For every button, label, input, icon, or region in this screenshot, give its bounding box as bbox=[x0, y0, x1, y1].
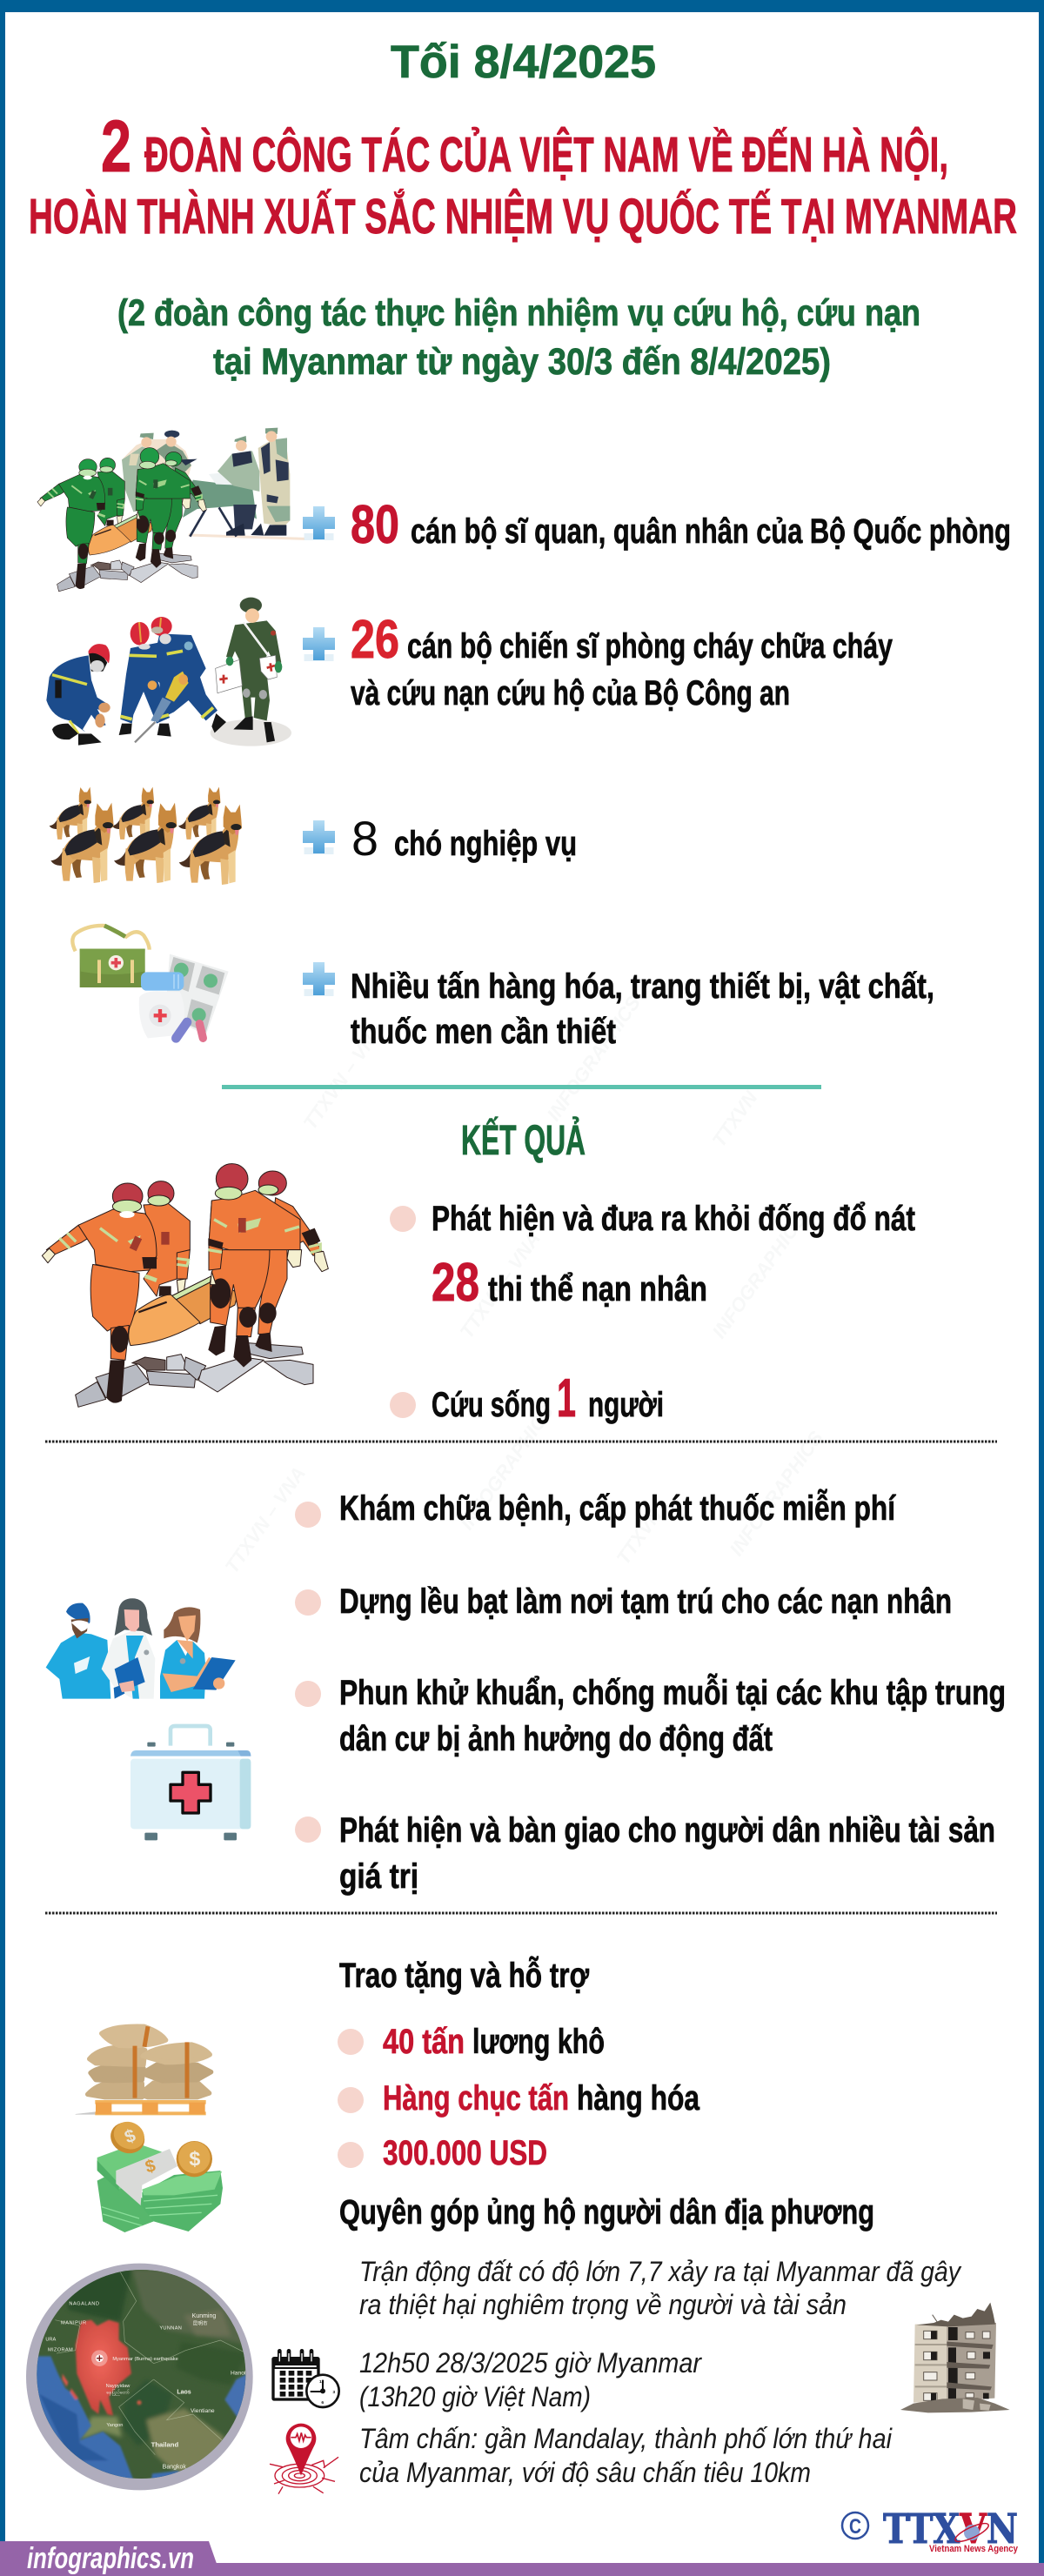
map: earthquake area: Kunming bbox=[192, 2313, 216, 2319]
result item: 1 rescued: 1 bbox=[557, 1368, 576, 1429]
illustration: collapsed building bbox=[900, 2303, 1010, 2412]
map: earthquake area: Myanmar (Burma) earthquake bbox=[112, 2357, 178, 2362]
text: TTXVN bbox=[708, 1087, 762, 1151]
illustration: medical staff bbox=[46, 1598, 236, 1699]
text: earthquake facts: (13h20 giờ Việt Nam) bbox=[359, 2381, 591, 2412]
icon: calendar and clock: 6 bbox=[321, 2400, 324, 2405]
result item: 28 bodies bbox=[390, 1200, 915, 1313]
illustration: money bbox=[97, 2117, 223, 2232]
result item: 28 bodies: 28 bbox=[432, 1253, 479, 1313]
icon: calendar and clock: 12 bbox=[319, 2379, 325, 2385]
map: earthquake area: Naypyidaw bbox=[106, 2384, 130, 2389]
heading: results: KẾT QUẢ bbox=[461, 1116, 586, 1164]
map: earthquake area: MANIPUR bbox=[61, 2321, 87, 2326]
footer bar: infographics.vn bbox=[27, 2542, 194, 2575]
list: aid activities: giá trị bbox=[339, 1857, 418, 1896]
map: earthquake area: Laos bbox=[177, 2390, 191, 2396]
result item: 1 rescued: người bbox=[588, 1386, 664, 1424]
list: donations: 40 tấn bbox=[383, 2023, 465, 2061]
icon: plus bbox=[303, 962, 335, 996]
map: earthquake area: နေပြည်တော် bbox=[106, 2388, 130, 2397]
list: donations: Hàng chục tấn bbox=[383, 2079, 569, 2118]
item: 80 officers bbox=[351, 495, 1011, 555]
result item: 28 bodies: thi thể nạn nhân bbox=[488, 1270, 707, 1308]
map: earthquake area: Bangkok bbox=[163, 2464, 186, 2470]
item: supplies bbox=[351, 967, 934, 1051]
item: 26 firefighters: cán bộ chiến sĩ phòng cháy chữa cháy bbox=[407, 627, 893, 666]
map: earthquake area: Yangon bbox=[106, 2423, 123, 2428]
text: earthquake facts: Trận động đất có độ lớn 7,7 xảy ra tại Myanmar đã gây bbox=[359, 2256, 962, 2287]
illustration: sacks on pallet bbox=[76, 2026, 211, 2115]
result item: 28 bodies: Phát hiện và đưa ra khỏi đống đổ nát bbox=[432, 1200, 915, 1238]
text: INFOGRAPHICS bbox=[543, 992, 645, 1125]
item: supplies: thuốc men cần thiết bbox=[351, 1013, 616, 1051]
icon: calendar and clock bbox=[271, 2351, 339, 2407]
map: earthquake area: MIZORAM bbox=[48, 2347, 73, 2352]
text: TTXVN – VNA bbox=[456, 1228, 545, 1342]
text: earthquake facts: Tâm chấn: gần Mandalay, thành phố lớn thứ hai bbox=[359, 2423, 893, 2454]
item: supplies: Nhiều tấn hàng hóa, trang thiết bị, vật chất, bbox=[351, 967, 934, 1006]
list: donations: lương khô bbox=[472, 2023, 605, 2061]
list: donations: 300.000 USD bbox=[383, 2134, 547, 2172]
heading: main title bbox=[29, 105, 1017, 244]
item: 26 firefighters: và cứu nạn cứu hộ của Bộ Công an bbox=[351, 674, 790, 713]
list: aid activities: dân cư bị ảnh hưởng do động đất bbox=[339, 1720, 773, 1758]
logo: TTXVN: TTXVN bbox=[883, 2506, 1018, 2553]
list: aid activities bbox=[295, 1488, 1006, 1896]
logo: TTXVN: Vietnam News Agency bbox=[929, 2544, 1019, 2554]
text: TTXVN – VNA bbox=[221, 1462, 310, 1577]
text: TTXVN – VNA bbox=[299, 1019, 388, 1134]
map: earthquake area: NAGALAND bbox=[69, 2301, 99, 2306]
illustration: first-aid kit bbox=[130, 1726, 251, 1840]
text: earthquake facts: ra thiệt hại nghiêm trọng về người và tài sản bbox=[359, 2289, 847, 2320]
illustration: service dogs bbox=[50, 787, 242, 885]
map: earthquake area bbox=[26, 2264, 253, 2490]
text: INFOGRAPHICS bbox=[726, 1427, 827, 1560]
illustration: soldiers carrying stretcher with officers at a table bbox=[122, 428, 304, 539]
result item: 1 rescued bbox=[390, 1368, 664, 1429]
list: aid activities: Khám chữa bệnh, cấp phát thuốc miễn phí bbox=[339, 1488, 896, 1528]
icon: plus bbox=[303, 627, 335, 661]
map: earthquake area: Vientiane bbox=[191, 2408, 215, 2414]
subtitle bbox=[117, 292, 920, 383]
text: earthquake facts: 12h50 28/3/2025 giờ Myanmar bbox=[359, 2347, 702, 2379]
icon: calendar and clock: 3 bbox=[332, 2390, 335, 2395]
text: INFOGRAPHICS bbox=[708, 1209, 810, 1342]
map: earthquake area: Hanoi bbox=[231, 2371, 246, 2377]
illustration: green rescuers bbox=[37, 448, 206, 592]
list: donations: Quyên góp ủng hộ người dân địa phương bbox=[339, 2193, 874, 2231]
text: earthquake facts: của Myanmar, với độ sâu chấn tiêu 10km bbox=[359, 2457, 811, 2488]
text: TTXVN bbox=[612, 1504, 666, 1569]
map: earthquake area: URA bbox=[45, 2338, 57, 2343]
text: INFOGRAPHICS bbox=[456, 1401, 558, 1534]
map: earthquake area: YUNNAN bbox=[159, 2326, 182, 2332]
list: donations: Trao tặng và hỗ trợ bbox=[339, 1955, 589, 1995]
heading: main title: 2 bbox=[101, 105, 131, 187]
list: donations bbox=[338, 1955, 874, 2231]
list: donations: hàng hóa bbox=[577, 2079, 700, 2118]
illustration: money: $ bbox=[189, 2147, 200, 2170]
map: earthquake area: Thailand bbox=[151, 2440, 178, 2448]
map: earthquake area: 昆明市 bbox=[193, 2319, 208, 2326]
title: date: Tối 8/4/2025 bbox=[391, 37, 656, 88]
illustration: money: $ bbox=[122, 2125, 138, 2148]
icon: plus bbox=[303, 820, 335, 854]
item: 8 dogs: chó nghiệp vụ bbox=[394, 825, 577, 863]
result item: 1 rescued: Cứu sống bbox=[432, 1386, 551, 1424]
item: 8 dogs: 8 bbox=[351, 811, 378, 866]
item: 8 dogs bbox=[351, 811, 577, 866]
icon: plus bbox=[303, 506, 335, 540]
illustration: money: $ bbox=[144, 2156, 157, 2178]
subtitle: tại Myanmar từ ngày 30/3 đến 8/4/2025) bbox=[213, 341, 831, 383]
text: earthquake facts bbox=[359, 2256, 962, 2488]
icon: epicenter pin bbox=[270, 2424, 338, 2494]
item: 26 firefighters: 26 bbox=[351, 610, 399, 670]
illustration: medical bag and medicine bbox=[72, 926, 229, 1038]
illustration: firefighters and medic bbox=[46, 598, 291, 746]
footer bar bbox=[0, 2541, 1044, 2576]
item: 80 officers: 80 bbox=[351, 495, 399, 555]
illustration: orange rescuers bbox=[42, 1164, 328, 1407]
logo: TTXVN: C bbox=[849, 2515, 861, 2539]
item: 26 firefighters bbox=[351, 610, 893, 713]
